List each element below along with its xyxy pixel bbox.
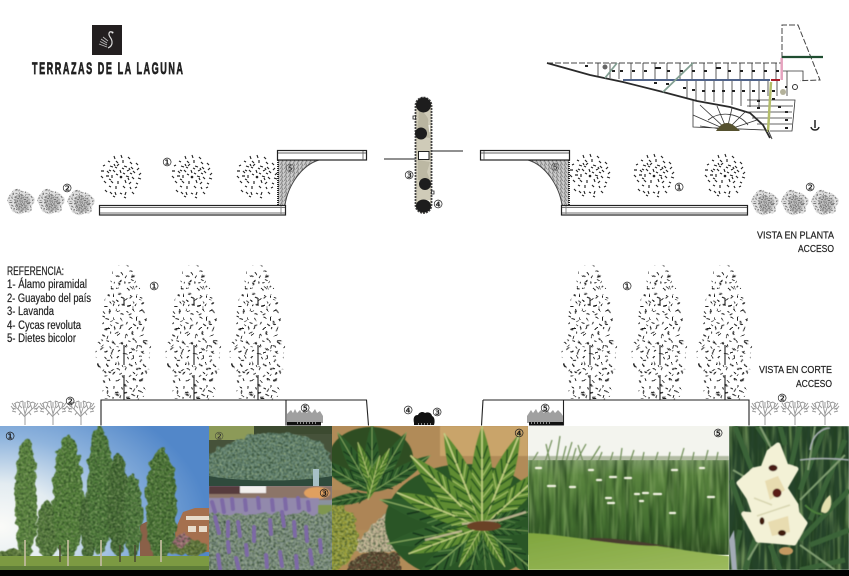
- caption: vista en planta: VISTA EN PLANTA: [757, 230, 834, 242]
- large cycas: [380, 426, 528, 570]
- petals: [739, 445, 805, 543]
- coloured roads: [623, 79, 770, 81]
- shrubs right: alamo piramidal: [570, 154, 745, 197]
- bottom black band: [0, 570, 849, 576]
- photo strip: [0, 423, 849, 576]
- planters and ground line: [101, 400, 749, 426]
- section number labels: ②: [65, 395, 75, 408]
- number labels: ①: [162, 156, 172, 169]
- number labels: ⑤: [285, 162, 295, 175]
- section number labels: ①: [622, 280, 632, 293]
- photo 2 number: ②: [214, 430, 224, 443]
- section view: [11, 262, 839, 426]
- upper-left cycas: [332, 426, 431, 506]
- central lavender bush: [414, 412, 435, 425]
- photo 5: dietes hedge: [528, 426, 729, 570]
- photo 3: lavender: [209, 486, 332, 570]
- small trees right: [751, 401, 839, 425]
- site plan map: [547, 25, 823, 139]
- reference legend: 3- Lavanda: [7, 306, 54, 318]
- number labels: ②: [62, 182, 72, 195]
- section number labels: ⑤: [540, 402, 550, 415]
- logo: Terrazas de la Laguna: [32, 25, 183, 78]
- reference legend: 2- Guayabo del país: [7, 293, 91, 305]
- plan view: left planting: [8, 150, 367, 215]
- section number labels: [65, 280, 787, 419]
- planter and gravel: [100, 150, 366, 215]
- boundary dashed: [547, 25, 820, 81]
- section number labels: ①: [149, 280, 159, 293]
- reference legend: 4- Cycas revoluta: [7, 320, 81, 332]
- north arrow: [811, 120, 819, 130]
- reference legend: REFERENCIA:: [7, 266, 64, 278]
- photo 3 number: ③: [319, 487, 329, 500]
- number labels right: [550, 161, 815, 194]
- section number labels: ④: [403, 404, 413, 417]
- dietes right: [527, 409, 563, 426]
- photo 2: guayabo shrub: [205, 426, 336, 486]
- caption: vista en corte: ACCESO: [796, 378, 832, 390]
- caption: vista en planta: [757, 230, 834, 255]
- section number labels: ②: [777, 392, 787, 405]
- title: TERRAZAS DE LA LAGUNA: [32, 59, 183, 78]
- number labels right: ⑤: [550, 161, 560, 174]
- section number labels: ⑤: [300, 402, 310, 415]
- photo 1 number: ①: [5, 430, 15, 443]
- island numbers: ④: [433, 198, 443, 211]
- photo 4: cycas revoluta: [332, 426, 528, 570]
- shrubs right: guayabo: [752, 191, 838, 215]
- poplars right: [558, 262, 757, 400]
- number labels right: ①: [674, 181, 684, 194]
- caption: vista en planta: ACCESO: [798, 243, 834, 255]
- icon: swan: [92, 25, 122, 55]
- reference legend: [7, 266, 91, 345]
- planter and gravel right: [480, 150, 748, 215]
- photo 5 number: ⑤: [713, 427, 723, 440]
- number labels: [62, 156, 295, 195]
- section number labels: ③: [432, 406, 442, 419]
- small trees left: [11, 401, 95, 425]
- plan view: right planting: [480, 150, 838, 215]
- poplars left: [92, 262, 290, 400]
- reference legend: 1- Álamo piramidal: [7, 278, 87, 291]
- fan lots: [693, 100, 765, 130]
- shrubs: alamo piramidal: [101, 155, 277, 198]
- photo 4 number: ④: [514, 427, 524, 440]
- island numbers: ③: [404, 169, 414, 182]
- caption: vista en corte: VISTA EN CORTE: [759, 364, 832, 376]
- shrubs: guayabo: [8, 190, 94, 215]
- number labels right: ②: [805, 181, 815, 194]
- dietes left: [287, 409, 323, 426]
- reference legend: 5- Dietes bicolor: [7, 333, 76, 345]
- island numbers: [404, 169, 443, 211]
- central island plan: [384, 98, 463, 213]
- photo 1: poplars: [0, 426, 209, 570]
- photo 6: dietes flower: [729, 426, 849, 570]
- caption: vista en corte: [759, 364, 832, 390]
- road dark curve: [547, 63, 770, 138]
